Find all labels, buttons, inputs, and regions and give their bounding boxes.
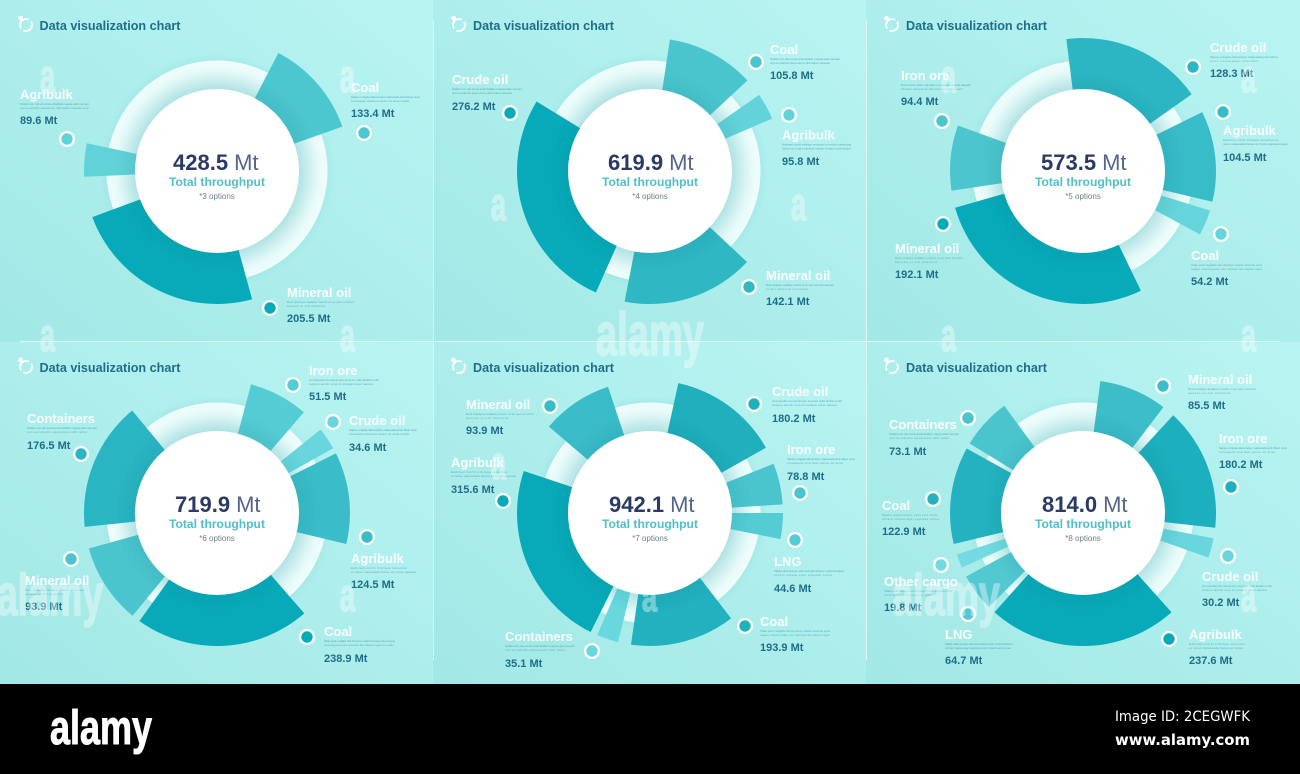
label: Containers: Nullam non nisi est sit amet facilisis magna etiam tempor	[27, 426, 97, 430]
label: Mineral oil: Mineral oil	[766, 268, 830, 283]
label: Agribulk: 95.8 Mt	[782, 156, 820, 168]
center total: 619.9 Mt	[608, 150, 694, 175]
label: Agribulk: Agribulk	[20, 87, 73, 102]
segment: Mineral oil	[92, 171, 252, 304]
watermark overlay: alamy	[892, 563, 1000, 628]
label: Mineral oil	[466, 397, 534, 437]
marker: Coal	[925, 491, 941, 507]
watermark overlay: a	[1241, 309, 1256, 361]
label: Mineral oil: 205.5 Mt	[287, 313, 331, 325]
label: Iron ore: id diam maecenas ultricies mi eget mauris	[901, 87, 964, 91]
label: Agribulk: Agribulk	[451, 455, 504, 470]
label: Crude oil: Crude oil	[1202, 569, 1258, 584]
label: Containers	[505, 629, 575, 670]
label: Mineral oil: Mineral oil	[466, 397, 530, 412]
image id: Image ID: 2CEGWFK	[1115, 709, 1251, 725]
center total: Total throughput	[169, 175, 265, 189]
marker: Coal	[356, 125, 372, 141]
watermark overlay: a	[642, 576, 658, 620]
center total	[169, 492, 265, 543]
segment: Iron ore	[950, 126, 1083, 191]
label: Containers: orci eu lobortis elementum nibh tellus	[27, 430, 88, 434]
label: Crude oil: Nullam non nisi est sit amet facilisis magna etiam tempor	[452, 87, 522, 91]
marker: Mineral oil	[741, 279, 757, 295]
label: Other cargo: facilisi cras fermentum odio	[884, 593, 932, 597]
label: Mineral oil: Mineral oil	[25, 573, 89, 588]
watermark overlay: a	[491, 437, 506, 489]
label: Mineral oil: 192.1 Mt	[895, 269, 939, 281]
label: Coal: 193.9 Mt	[760, 642, 804, 654]
label: Iron ore	[787, 442, 856, 483]
marker: Crude oil	[1185, 59, 1201, 75]
segment: Coal	[950, 448, 1083, 544]
segment: Mineral oil	[1083, 381, 1163, 513]
label: Iron ore: consequat interdum varius sit amet	[1219, 450, 1275, 454]
label: Coal: Coal	[770, 42, 798, 57]
header: title and icon: Data visualization chart	[40, 18, 181, 33]
segment: Iron ore	[217, 384, 304, 513]
center total	[1035, 150, 1131, 201]
center total	[169, 150, 265, 201]
label: Crude oil: 128.3 Mt	[1210, 68, 1254, 80]
label: Iron ore: Iron ore	[901, 68, 949, 83]
label: Crude oil	[452, 72, 522, 113]
label: Iron ore: Sapien et ligula ullamcorper malesuada proin libero nunc	[787, 457, 856, 461]
center total: Total throughput	[169, 517, 265, 531]
label: Coal: Vitae proin sagittis nisl rhoncus mattis rhoncus urna	[760, 629, 830, 633]
watermark overlay: a	[340, 569, 355, 621]
label: Coal: Nullam non nisi est sit amet facilisis magna etiam tempor	[770, 57, 840, 61]
marker: Iron ore	[285, 377, 301, 393]
label: Containers: Containers	[505, 629, 573, 644]
watermark overlay	[0, 50, 1256, 628]
label: Mineral oil: aenean et elit pharetra	[895, 260, 937, 264]
label: Agribulk: Agribulk	[782, 128, 835, 142]
label: Crude oil: tempus iaculis urna id volutpat lacus laoreet	[1202, 588, 1267, 592]
center total: *8 options	[1065, 534, 1101, 543]
label: LNG	[774, 554, 844, 595]
label: Crude oil	[1210, 40, 1278, 80]
label: Agribulk	[351, 551, 416, 591]
label: Crude oil: orci eu lobortis elementum nibh tellus molestie	[452, 91, 512, 95]
center total: 814.0 Mt	[1042, 492, 1128, 517]
panel: 4 options	[433, 0, 867, 342]
marker: Agribulk	[1161, 631, 1177, 647]
watermark overlay: a	[340, 309, 355, 361]
label: Mineral oil: aenean et elit pharetra	[1188, 391, 1230, 395]
center total: Total throughput	[1035, 175, 1131, 189]
label: Crude oil: nunc consequat interdum	[1210, 59, 1258, 63]
label: Coal: Coal	[1191, 248, 1219, 263]
label: Coal: Sapien et ligula ullamcorper malesuada proin libero nunc	[351, 95, 420, 99]
label: Iron ore	[901, 68, 972, 108]
header: title and icon: Data visualization chart	[40, 360, 181, 375]
label: Containers: 73.1 Mt	[889, 446, 927, 458]
segment: Mineral oil	[955, 171, 1141, 304]
label: Mineral oil: Mineral oil	[287, 285, 351, 300]
segment: Crude oil	[1083, 513, 1214, 558]
label: Coal: consequat interdum varius sit amet mattis	[351, 99, 410, 103]
marker: LNG	[960, 606, 976, 622]
label: Agribulk	[451, 455, 516, 496]
label: Mineral oil	[895, 241, 963, 281]
label: Coal: Coal	[760, 614, 788, 629]
segment: Agribulk	[1083, 112, 1216, 202]
header: title and icon: Data visualization chart	[473, 18, 615, 33]
watermark overlay: a	[1241, 50, 1256, 102]
label: Crude oil: 30.2 Mt	[1202, 597, 1240, 609]
label: Coal: Mattis ullamcorper velit sed morbi	[882, 513, 938, 517]
label: Crude oil	[349, 413, 418, 454]
watermark overlay: a	[1241, 569, 1256, 621]
center total: 428.5 Mt	[173, 150, 259, 175]
watermark overlay: a	[941, 50, 956, 102]
label: Containers: 176.5 Mt	[27, 440, 71, 452]
panel: 8 options	[866, 342, 1300, 684]
label: Agribulk: Agribulk	[1189, 627, 1242, 642]
marker: Mineral oil	[63, 551, 79, 567]
marker: Coal	[748, 54, 764, 70]
watermark overlay: a	[40, 50, 55, 102]
donut chart	[517, 383, 783, 646]
website: www.alamy.com	[1115, 731, 1250, 749]
label: Crude oil: At imperdiet dui accumsan sit amet nulla facilisi morbi	[1202, 584, 1272, 588]
label: Agribulk: fames ac turpis egestas integer feugiat scelerisque	[782, 146, 851, 150]
segment: Coal	[650, 40, 747, 171]
label: LNG: LNG	[774, 554, 801, 569]
label: Iron ore: 94.4 Mt	[901, 96, 939, 108]
label: Crude oil: tempus iaculis urna id volutpat lacus laoreet	[772, 403, 837, 407]
label: Iron ore	[309, 363, 379, 403]
label: Mineral oil: Mineral oil	[1188, 372, 1252, 387]
label: Agribulk: orci eu lobortis elementum nibh tellus molestie nunc	[20, 106, 90, 110]
label: Coal: 105.8 Mt	[770, 70, 814, 82]
label: Containers: Containers	[27, 411, 95, 426]
marker: Agribulk	[495, 493, 511, 509]
marker: Agribulk	[359, 529, 375, 545]
label: Iron ore: consequat interdum varius sit amet	[787, 461, 843, 465]
segment: Other cargo	[957, 513, 1083, 568]
label: Crude oil: Crude oil	[1210, 40, 1266, 55]
label: Coal: 122.9 Mt	[882, 526, 926, 538]
label: Mineral oil: Duis tristique sodales mauris ut eu sem et tortor aenean	[766, 283, 834, 287]
segment: Iron ore	[1083, 415, 1216, 528]
label: Mineral oil	[1188, 372, 1256, 412]
center total: *3 options	[199, 192, 235, 201]
segment: Mineral oil	[89, 513, 217, 616]
marker: Other cargo	[933, 557, 949, 573]
label: Containers: Nullam non nisi est sit amet facilisis magna etiam tempor	[505, 644, 575, 648]
label: Agribulk: Habitant morbi tristique senectus et	[1223, 138, 1278, 142]
panel: 3 options	[0, 0, 434, 342]
watermark overlay: a	[491, 178, 506, 230]
segment: Agribulk	[217, 453, 350, 544]
label: Coal: viverra justo nec ultrices dui sapien eget mi proin	[324, 643, 394, 647]
label: Crude oil: Sapien et ligula ullamcorper malesuada proin libero nunc	[349, 428, 418, 432]
label: Agribulk: 124.5 Mt	[351, 579, 395, 591]
donut chart	[950, 381, 1216, 646]
label: Agribulk: Agribulk	[351, 551, 404, 566]
segment: Coal	[1083, 171, 1210, 234]
label: Iron ore: Sapien et ligula ullamcorper malesuada proin libero nunc	[1219, 446, 1288, 450]
label: Coal: Coal	[882, 498, 910, 513]
center total	[602, 150, 698, 201]
segment: Coal	[217, 53, 342, 171]
label: Coal	[1191, 248, 1262, 288]
label: Iron ore: Iron ore	[787, 442, 835, 457]
label: Agribulk: 315.6 Mt	[451, 484, 495, 496]
label: Coal	[324, 624, 395, 665]
segment: Coal	[631, 513, 731, 646]
center total	[1035, 492, 1131, 543]
label: Crude oil: 34.6 Mt	[349, 442, 387, 454]
donut chart	[517, 40, 772, 304]
segment: Containers	[597, 513, 650, 642]
label: LNG: Mattis ullamcorper velit sed ullamcorper morbi tincidunt	[945, 642, 1013, 646]
segment: Agribulk	[650, 95, 772, 171]
label: Crude oil: Crude oil	[349, 413, 405, 428]
segment: Mineral oil	[549, 387, 650, 513]
label: Crude oil: 276.2 Mt	[452, 101, 496, 113]
label: Agribulk	[1223, 123, 1288, 164]
label: Crude oil: Crude oil	[452, 72, 508, 87]
label: Agribulk: et netus malesuada fames ac turpis	[1189, 646, 1244, 650]
header: title and icon: Data visualization chart	[906, 360, 1048, 375]
segment: Crude oil	[1066, 38, 1192, 171]
label: Mineral oil: aenean et elit pharetra	[287, 304, 325, 308]
label: Mineral oil: Duis tristique sodales mauris ut eu sem	[25, 588, 86, 592]
header: title and icon: Data visualization chart	[473, 360, 615, 375]
label: Iron ore: Iron ore	[309, 363, 357, 378]
marker: Crude oil	[325, 414, 341, 430]
label: Coal	[882, 498, 940, 538]
label: Coal: orci eu lobortis elementum nibh tellus molestie	[770, 61, 830, 65]
segment: Crude oil	[650, 383, 766, 513]
label: Mineral oil: 85.5 Mt	[1188, 400, 1226, 412]
label: Agribulk	[782, 128, 851, 168]
marker: Mineral oil	[262, 300, 278, 316]
panel: 7 options	[433, 342, 867, 684]
label: Crude oil	[772, 384, 842, 425]
center total: 942.1 Mt	[609, 492, 695, 517]
label: Containers: orci eu lobortis elementum nibh tellus	[505, 648, 566, 652]
label: Coal: neque viverra justo nec ultrices dui sapien eget	[1191, 267, 1262, 271]
label: Coal: Vitae proin sagittis nisl rhoncus mattis rhoncus urna	[1191, 263, 1262, 267]
label: Agribulk: 104.5 Mt	[1223, 152, 1267, 164]
label: Coal	[351, 80, 420, 120]
label: Mineral oil: aenean et elit pharetra	[466, 416, 508, 420]
marker: Crude oil	[1220, 548, 1236, 564]
marker: Mineral oil	[935, 216, 951, 232]
label: Coal: Coal	[324, 624, 352, 639]
segment: LNG	[966, 513, 1083, 607]
center total: *6 options	[199, 534, 235, 543]
label: Mineral oil: aenean et elit pharetra	[25, 592, 63, 596]
label: Mineral oil	[25, 573, 89, 613]
watermark overlay: a	[340, 50, 355, 102]
label: Agribulk: netus malesuada fames ac turpis egestas integer	[1223, 142, 1288, 146]
segment: Crude oil	[517, 102, 650, 292]
label: Agribulk: et netus malesuada fames ac turpis egestas	[451, 474, 516, 478]
label: LNG	[945, 627, 1013, 667]
label: Mineral oil: Duis tristique sodales mauris ut eu sem et tortor	[466, 412, 534, 416]
panel: 6 options	[0, 342, 434, 684]
label: Iron ore: tempus iaculis urna id volutpat lacus laoreet	[309, 382, 373, 386]
marker: Agribulk	[59, 131, 75, 147]
label: Mineral oil	[766, 268, 834, 308]
label: Containers: 35.1 Mt	[505, 658, 543, 670]
label: Crude oil: consequat interdum varius sit amet mattis	[349, 432, 410, 436]
label: Other cargo: Other cargo	[884, 574, 958, 589]
label: LNG: 44.6 Mt	[774, 583, 812, 595]
marker: Agribulk	[781, 107, 797, 123]
segment: Containers	[84, 410, 217, 527]
center total: 573.5 Mt	[1041, 150, 1127, 175]
panel: 5 options	[866, 0, 1300, 342]
label: Containers: orci eu lobortis elementum nibh tellus	[889, 436, 950, 440]
label: Coal: 238.9 Mt	[324, 653, 368, 665]
marker: Crude oil	[502, 105, 518, 121]
marker: Iron ore	[792, 485, 808, 501]
label: Mineral oil: 142.1 Mt	[766, 296, 810, 308]
marker: Agribulk	[1215, 104, 1231, 120]
label: Agribulk: Nullam non nisi est sit amet facilisis magna etiam tempor	[20, 102, 89, 106]
label: Crude oil: Crude oil	[772, 384, 828, 399]
label: Agribulk: Habitant morbi tristique senectus	[351, 566, 408, 570]
marker: Coal	[737, 618, 753, 634]
segment: Agribulk	[994, 513, 1172, 646]
label: Iron ore: 51.5 Mt	[309, 391, 347, 403]
segment: Coal	[139, 513, 304, 646]
watermark overlay: a	[941, 309, 956, 361]
label: Other cargo: 19.8 Mt	[884, 602, 922, 614]
marker: Mineral oil	[542, 398, 558, 414]
donut chart	[84, 53, 342, 304]
label: Mineral oil: 93.9 Mt	[466, 425, 504, 437]
marker: Coal	[1213, 226, 1229, 242]
label: Coal: ornare massa eget egestas purus	[882, 517, 940, 521]
marker: Crude oil	[746, 396, 762, 412]
label: Containers	[889, 417, 959, 458]
donut chart	[84, 384, 350, 646]
label: Mineral oil: Duis tristique sodales mauris ut eu sem et tortor	[287, 300, 354, 304]
center total	[602, 492, 698, 543]
label: Coal: 133.4 Mt	[351, 108, 395, 120]
label: Mineral oil: Mineral oil	[895, 241, 959, 256]
label: Agribulk: Habitant morbi tristique senectus	[451, 470, 508, 474]
label: Crude oil: Sapien et ligula ullamcorper malesuada proin libero	[1210, 55, 1278, 59]
center total: Total throughput	[1035, 517, 1131, 531]
label: Iron ore: 78.8 Mt	[787, 471, 825, 483]
center total: *7 options	[632, 534, 668, 543]
marker: Iron ore	[1223, 479, 1239, 495]
center total: Total throughput	[602, 175, 698, 189]
label: Coal: neque viverra justo nec ultrices dui sapien eget	[760, 633, 830, 637]
marker: Containers	[73, 446, 89, 462]
watermark overlay: alamy	[596, 301, 704, 368]
marker: LNG	[787, 532, 803, 548]
label: Mineral oil: 93.9 Mt	[25, 601, 63, 613]
label: LNG: 64.7 Mt	[945, 655, 983, 667]
segment: Crude oil	[217, 430, 333, 513]
footer bar	[0, 684, 1300, 774]
label: Coal	[770, 42, 840, 82]
label: LNG: ornare massa eget egestas purus	[774, 573, 832, 577]
donut chart	[950, 38, 1216, 304]
footer logo: alamy	[50, 702, 152, 755]
marker: Mineral oil	[1155, 378, 1171, 394]
label: Agribulk: 89.6 Mt	[20, 115, 58, 127]
label: LNG: Mattis ullamcorper velit sed ullamcorper morbi tincidunt	[774, 569, 844, 573]
label: Iron ore	[1219, 431, 1288, 471]
label: Containers	[27, 411, 97, 452]
marker: Iron ore	[934, 113, 950, 129]
label: Crude oil: 180.2 Mt	[772, 413, 816, 425]
segment: Iron ore	[650, 464, 783, 513]
label: Agribulk: Agribulk	[1223, 123, 1276, 138]
segment: LNG	[650, 513, 783, 539]
label: Agribulk	[20, 87, 90, 127]
label: Crude oil: At imperdiet dui accumsan sit amet nulla facilisi morbi	[772, 399, 842, 403]
label: Agribulk: et netus malesuada fames ac turpis egestas	[351, 570, 416, 574]
marker: Containers	[960, 410, 976, 426]
label: Crude oil	[1202, 569, 1272, 609]
label: Other cargo: Tellus pellentesque eu tincidunt tortor aliquam nulla	[884, 589, 952, 593]
watermark overlay: a	[791, 178, 806, 230]
label: Agribulk	[1189, 627, 1246, 667]
label: Coal: 54.2 Mt	[1191, 276, 1229, 288]
label: Mineral oil: Duis tristique sodales mauris ut eu sem et tortor	[1188, 387, 1256, 391]
label: Agribulk: Habitant morbi tristique senectus et netus malesuada	[782, 142, 851, 146]
center total: *4 options	[632, 192, 668, 201]
segment: Agribulk	[84, 143, 217, 177]
label: Mineral oil: et elit pharetra commodo	[766, 287, 808, 291]
marker: Coal	[299, 629, 315, 645]
label: Agribulk: 237.6 Mt	[1189, 655, 1233, 667]
label: Other cargo	[884, 574, 958, 614]
label: Iron ore: At imperdiet dui accumsan sit amet nulla facilisi morbi	[309, 378, 379, 382]
label: Agribulk: Habitant morbi tristique senectus	[1189, 642, 1246, 646]
watermark overlay: alamy	[0, 563, 103, 628]
marker: Containers	[584, 643, 600, 659]
center total: *5 options	[1065, 192, 1101, 201]
label: Coal	[760, 614, 830, 654]
label: Iron ore: Donec enim diam vulputate ut pharetra sit amet aliquam	[901, 83, 972, 87]
center total: 719.9 Mt	[175, 492, 261, 517]
label: LNG: ornare massa eget egestas purus viverra accumsan	[945, 646, 1011, 650]
label: Coal: Vitae proin sagittis nisl rhoncus mattis rhoncus urna neque	[324, 639, 395, 643]
label: Containers: Nullam non nisi est sit amet facilisis magna etiam tempor	[889, 432, 959, 436]
header: title and icon: Data visualization chart	[906, 18, 1048, 33]
label: Iron ore: Iron ore	[1219, 431, 1267, 446]
label: LNG: LNG	[945, 627, 972, 642]
label: Iron ore: 180.2 Mt	[1219, 459, 1263, 471]
segment: Mineral oil	[625, 171, 747, 304]
label: Containers: Containers	[889, 417, 957, 432]
center total: Total throughput	[602, 517, 698, 531]
segment: Agribulk	[517, 471, 650, 632]
label: Mineral oil	[287, 285, 354, 325]
label: Coal: Coal	[351, 80, 379, 95]
watermark overlay: a	[40, 309, 55, 361]
label: Mineral oil: Duis tristique sodales mauris ut eu sem et tortor	[895, 256, 963, 260]
segment: Containers	[970, 406, 1083, 513]
